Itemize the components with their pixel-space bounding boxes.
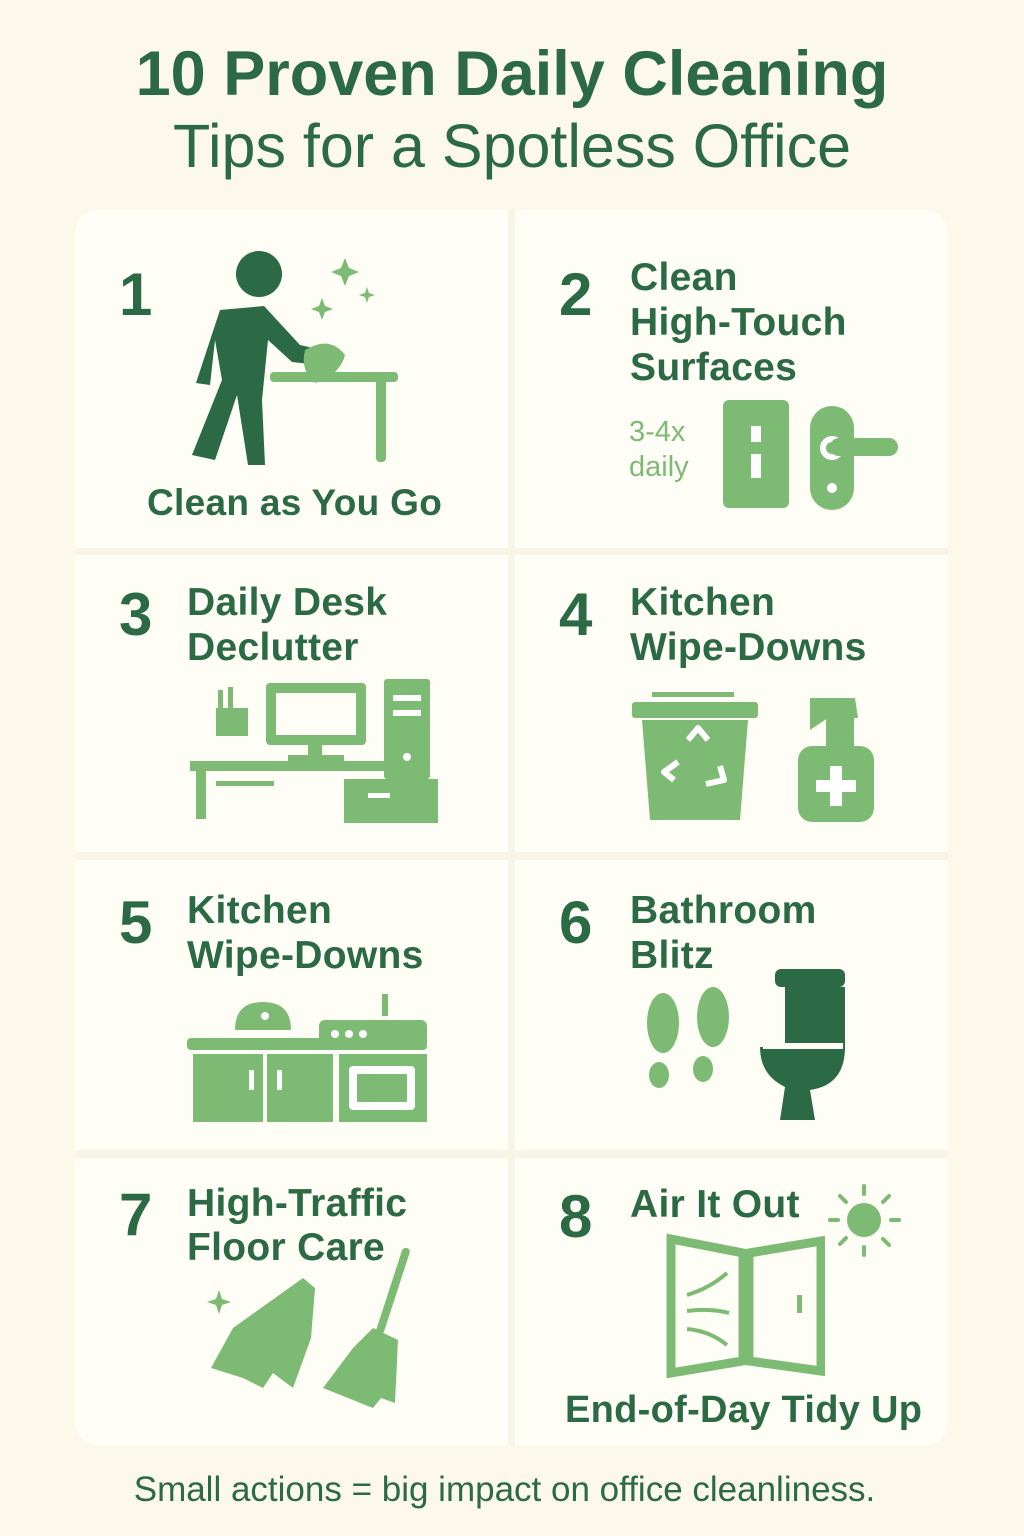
panel: 2 high-touch — [515, 210, 948, 548]
panel: 6 bathroom blitz — [515, 860, 948, 1150]
panel: 1 clean as you go: 1 — [119, 261, 152, 328]
panel: 4 kitchen wipe-downs — [515, 555, 948, 852]
title — [136, 39, 888, 180]
icon: brooms — [207, 1248, 410, 1408]
title: Tips for a Spotless Office — [173, 112, 851, 180]
panel: 4 kitchen wipe-downs: 4 — [559, 581, 592, 648]
title: 10 Proven Daily Cleaning — [136, 39, 888, 109]
panel: 7 floor care: Floor Care — [187, 1226, 385, 1269]
panel: 8 air it out: Air It Out — [630, 1183, 800, 1226]
panel: 6 bathroom blitz: 6 — [559, 889, 592, 956]
caption: Clean as You Go — [147, 482, 442, 523]
frequency label — [629, 416, 689, 483]
panel: 5 kitchen wipe-downs: Wipe-Downs — [187, 934, 424, 977]
panel: 5 kitchen wipe-downs — [75, 860, 508, 1150]
panel: 3 desk declutter — [75, 555, 508, 852]
icon: kitchen counter — [187, 994, 427, 1122]
panel: 8 air it out — [515, 1158, 948, 1445]
panel: 5 kitchen wipe-downs: 5 — [119, 889, 152, 956]
panel: 6 bathroom blitz: Blitz — [630, 934, 714, 977]
panel: 2 high-touch: Clean — [630, 256, 738, 299]
panel: 3 desk declutter: Declutter — [187, 626, 359, 669]
icon: person wiping desk — [192, 251, 398, 465]
footer: Small actions = big impact on office cleanliness. — [134, 1470, 875, 1509]
icon: open window — [666, 1234, 825, 1378]
panel: 4 kitchen wipe-downs: Wipe-Downs — [630, 626, 867, 669]
panel: 7 floor care: High-Traffic — [187, 1182, 407, 1225]
icon: switch and door handle — [723, 400, 898, 510]
frequency label: 3-4x — [629, 416, 685, 448]
panel grid background — [75, 210, 948, 1445]
panel: 2 high-touch: High-Touch — [630, 301, 847, 344]
caption: End-of-Day Tidy Up — [565, 1389, 922, 1431]
panel: 3 desk declutter: 3 — [119, 581, 152, 648]
panel: 6 bathroom blitz: Bathroom — [630, 889, 817, 932]
panel: 7 floor care: 7 — [119, 1181, 152, 1248]
panel: 7 floor care — [75, 1158, 508, 1445]
panel: 3 desk declutter: Daily Desk — [187, 581, 387, 624]
icon: recycling bin and spray bottle — [632, 692, 874, 822]
panel: 8 air it out: 8 — [559, 1183, 592, 1250]
frequency label: daily — [629, 451, 689, 483]
icon: sun — [828, 1184, 901, 1257]
panel: 2 high-touch: 2 — [559, 261, 592, 328]
icon: footprints and toilet — [647, 969, 845, 1120]
panel: 4 kitchen wipe-downs: Kitchen — [630, 581, 775, 624]
icon: desk with computer — [190, 679, 438, 823]
panel: 1 clean as you go — [75, 210, 508, 548]
panel: 5 kitchen wipe-downs: Kitchen — [187, 889, 332, 932]
panel: 2 high-touch: Surfaces — [630, 346, 797, 389]
